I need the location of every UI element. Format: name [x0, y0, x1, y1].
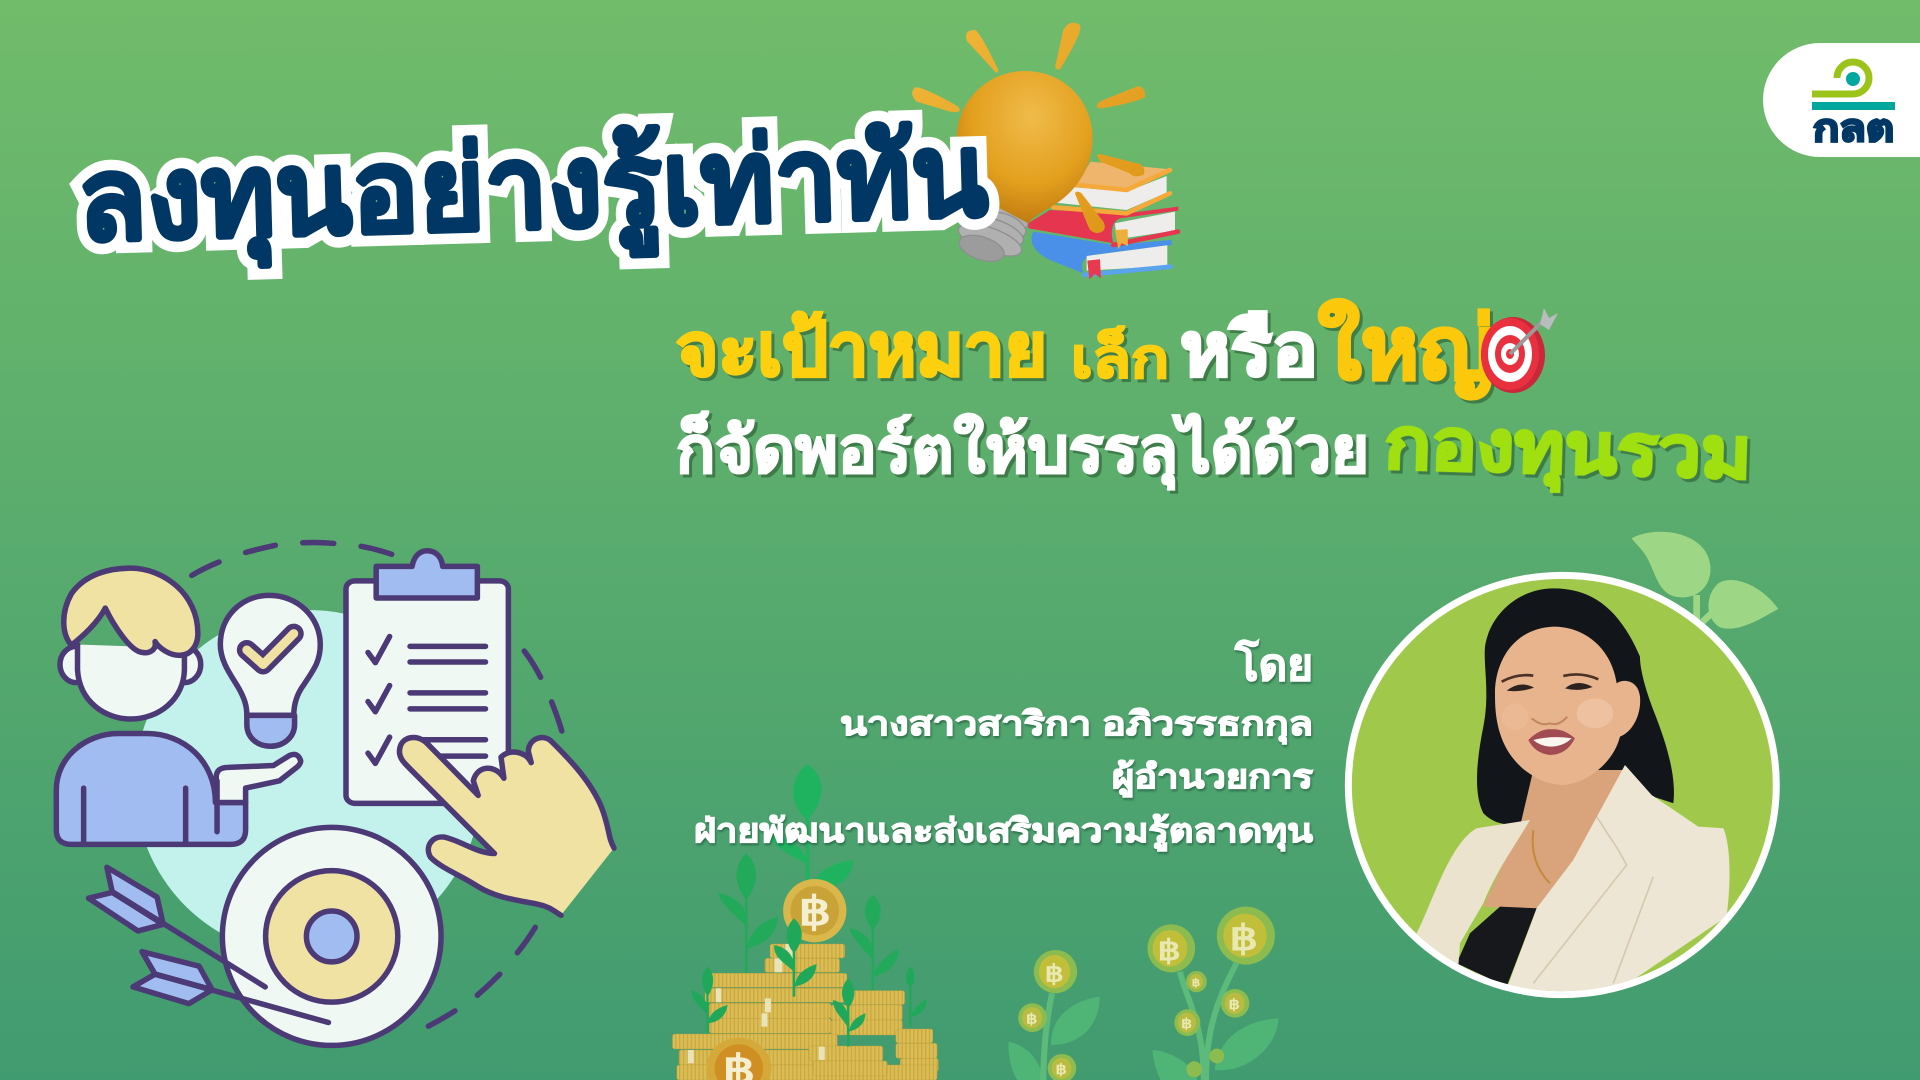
plant right: ฿ [1229, 918, 1258, 958]
plant right [1147, 907, 1278, 1080]
person [56, 568, 301, 844]
left sprouts [718, 853, 899, 993]
portrait: figure [1417, 588, 1730, 993]
bulb rays [912, 23, 1145, 233]
icon: light bulb with rays [912, 23, 1145, 266]
plant right: ฿ [1157, 934, 1181, 966]
illustration: coin pile and sprouts [673, 764, 938, 1080]
plant right: ฿ [1192, 976, 1201, 989]
icon: leaves behind portrait [1632, 532, 1778, 629]
coin: bottom [706, 1038, 771, 1080]
title: ลงทุนอย่างรู้เท่าทัน [76, 110, 990, 272]
author: department: ฝ่ายพัฒนาและส่งเสริมความรู้ตลาดทุน [694, 812, 1314, 852]
author: by: โดย [1234, 638, 1313, 690]
subtitle line 2: ก็จัดพอร์ตให้บรรลุได้ด้วย [676, 412, 1369, 490]
icon: dart target [1481, 308, 1558, 393]
illustration: investor planning [56, 542, 614, 1045]
author credit [694, 638, 1314, 852]
front sprouts [691, 918, 927, 1047]
dashed ring [192, 542, 562, 1026]
icon: stack of books [1028, 162, 1178, 279]
logo: bar [1812, 102, 1895, 110]
bulb screw base [955, 202, 1032, 266]
logo badge [1763, 43, 1920, 157]
plant left: ฿ [1045, 960, 1064, 987]
arrows [89, 867, 328, 1023]
subtitle: or: หรือ [1180, 308, 1318, 391]
subtitle: target: จะเป้าหมาย [676, 308, 1047, 391]
plant left: ฿ [1055, 1062, 1067, 1077]
logo: wordmark: กลต [1813, 108, 1894, 150]
illustration: coin plants [1008, 907, 1278, 1080]
author: name: นางสาวสาริกา อภิวรรธกกุล [840, 705, 1313, 745]
blob [135, 610, 481, 957]
subtitle line 1 [676, 300, 1494, 400]
coin: top [783, 879, 846, 942]
logo: spiral mark [1812, 62, 1869, 94]
title: ลงทุนอย่างรู้เท่าทัน [76, 110, 990, 272]
subtitle: mutual fund: กองทุนรวม [1383, 404, 1753, 498]
subtitle: big: ใหญ่ [1318, 300, 1494, 400]
author: position: ผู้อำนวยการ [1112, 758, 1313, 798]
clipboard checklist [346, 551, 508, 803]
plant left [1008, 950, 1100, 1080]
logo: dot [1846, 72, 1860, 86]
plant left: ฿ [1026, 1011, 1037, 1027]
tall sprout behind [768, 764, 853, 890]
target [222, 827, 441, 1045]
pointing hand [399, 737, 614, 915]
portrait [1348, 575, 1776, 995]
icon: idea bulb [220, 595, 320, 746]
plant right: ฿ [1228, 997, 1240, 1012]
portrait: ring [1348, 575, 1776, 995]
subtitle: small: เล็ก [1071, 327, 1169, 389]
plant right: ฿ [1181, 1017, 1192, 1031]
coin stacks [673, 944, 938, 1080]
coin: top: ฿ [798, 889, 831, 934]
bulb glass [956, 71, 1093, 223]
